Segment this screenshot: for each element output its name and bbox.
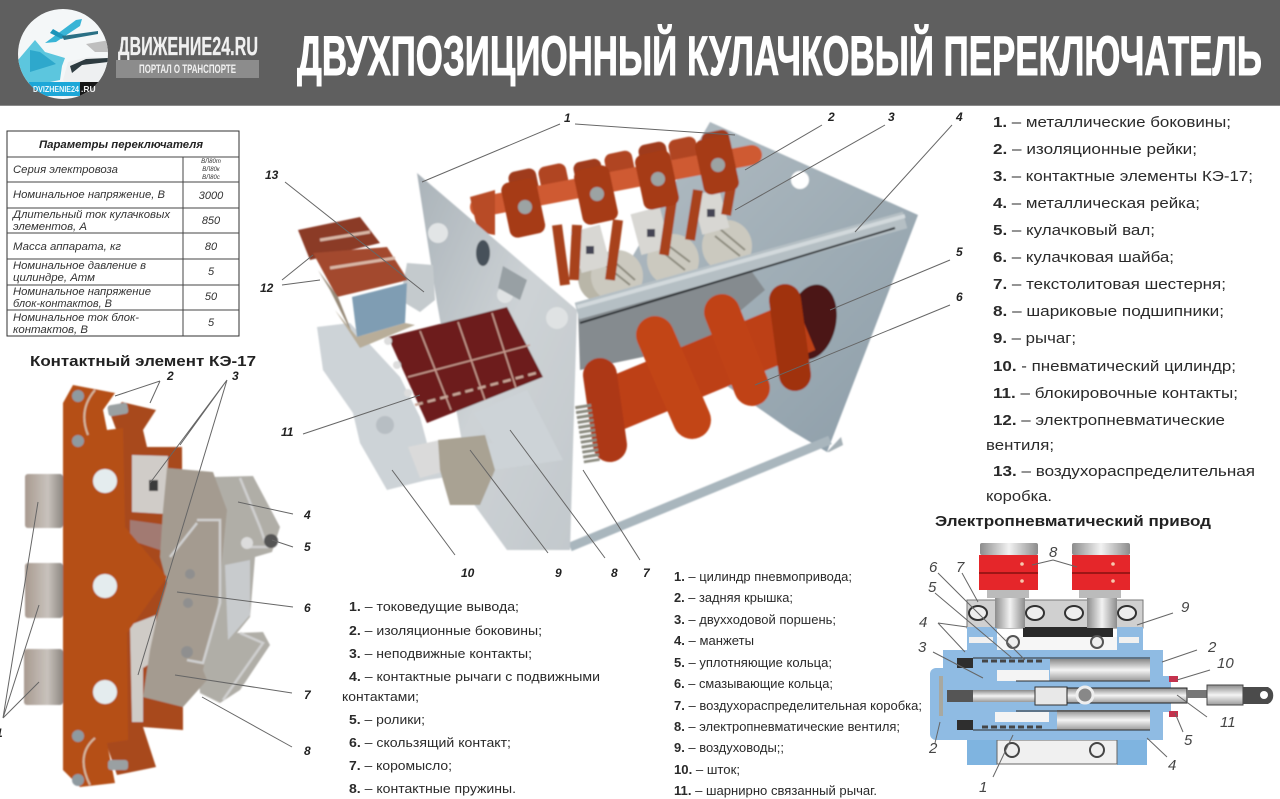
- legend: main assembly: вентиля;: [986, 438, 1054, 454]
- legend: pneumatic drive: 3. – двухходовой поршень;: [674, 613, 836, 627]
- upper rear clamps: [507, 128, 734, 202]
- legend: main assembly: 2. – изоляционные рейки;: [993, 142, 1197, 158]
- legend: main assembly: 9. – рычаг;: [993, 331, 1076, 347]
- legend: contact element: 8. – контактные пружины.: [349, 782, 516, 796]
- legend: pneumatic drive: 5. – уплотняющие кольца;: [674, 656, 832, 670]
- legend: pneumatic drive: 8. – электропневматические вентиля;: [674, 720, 900, 734]
- legend: main assembly: 13. – воздухораспределительная: [993, 464, 1255, 480]
- contact element callouts: 6: [304, 601, 311, 615]
- front red plate: [63, 385, 167, 787]
- diagram callouts: 3: [918, 639, 927, 656]
- parameters table: 850: [202, 215, 221, 227]
- header band: [0, 0, 1280, 106]
- parameters table: элементов, А: [13, 221, 87, 233]
- parameters table: Серия электровоза: [13, 164, 118, 176]
- parameters table: ВЛ80к: [202, 167, 221, 173]
- diagram callouts: 6: [929, 559, 938, 576]
- parameters table: Масса аппарата, кг: [13, 241, 122, 253]
- parameters table: 80: [205, 241, 218, 253]
- valve boxes: [298, 217, 435, 348]
- contact tabs: [24, 474, 63, 705]
- legend: pneumatic drive: 11. – шарнирно связанный рычаг.: [674, 784, 877, 798]
- diagram callouts: 11: [1220, 714, 1236, 731]
- contact element callouts: 7: [304, 688, 312, 702]
- legend: main assembly: 12. – электропневматические: [993, 413, 1225, 429]
- diagram: electro-pneumatic drive: [918, 543, 1273, 796]
- brown strips: [557, 175, 733, 285]
- heading: pneumatic drive: Электропневматический привод: [935, 514, 1211, 530]
- parameters table: 50: [205, 291, 218, 303]
- contact element callouts: 8: [304, 744, 311, 758]
- main callouts: 11: [281, 425, 294, 439]
- contact element callouts: 3: [232, 369, 239, 383]
- diagram callouts: 7: [956, 559, 965, 576]
- legend: main assembly: 8. – шариковые подшипники;: [993, 304, 1224, 320]
- parameters table: Номинальное напряжение: [13, 286, 151, 298]
- parameters table: Номинальное напряжение, В: [13, 189, 165, 201]
- logo banner text: .RU: [81, 84, 96, 94]
- white contact blocks: [571, 189, 729, 273]
- legend: contact element: 5. – ролики;: [349, 713, 425, 727]
- photo: cam switch assembly: [298, 122, 918, 550]
- legend: main assembly: 7. – текстолитовая шестерня;: [993, 277, 1226, 293]
- legend: main assembly: коробка.: [986, 489, 1052, 505]
- legend: main assembly: 3. – контактные элементы КЭ-17;: [993, 169, 1253, 185]
- legend: main assembly: [986, 115, 1255, 505]
- photo: contact element KE-17: [24, 385, 280, 787]
- diagram callouts: 1: [979, 779, 987, 796]
- piston rings: [982, 661, 1044, 727]
- parameters table: Длительный ток кулачковых: [11, 209, 171, 221]
- pneumatic cylinder body: [317, 323, 563, 490]
- parameters table: блок-контактов, В: [13, 298, 112, 310]
- legend: pneumatic drive: 4. – манжеты: [674, 634, 754, 648]
- parameters table: [7, 131, 239, 336]
- solenoid valve left: [979, 543, 1038, 628]
- lever: [143, 468, 227, 707]
- main callouts: 10: [461, 566, 475, 580]
- front plate bolts and hole: [428, 223, 568, 329]
- legend: pneumatic drive: 9. – воздуховоды;;: [674, 741, 784, 755]
- legend: contact element: 2. – изоляционные боковины;: [349, 624, 542, 638]
- diagram callouts: 10: [1217, 655, 1234, 672]
- rear red side plate: [105, 402, 183, 775]
- hole in rear plate: [791, 171, 809, 189]
- parameters table: ВЛ80т: [201, 159, 221, 165]
- spring bars: [170, 478, 267, 700]
- legend: contact element: 4. – контактные рычаги с подвижными: [349, 670, 600, 684]
- silver cam contacts: [578, 220, 765, 370]
- parameters table: цилиндре, Атм: [13, 272, 95, 284]
- main callouts: 12: [260, 281, 274, 295]
- diagram callouts: 9: [1181, 599, 1190, 616]
- legend: contact element: 3. – неподвижные контакты;: [349, 647, 532, 661]
- legend: main assembly: 6. – кулачковая шайба;: [993, 250, 1174, 266]
- legend: main assembly: 5. – кулачковый вал;: [993, 223, 1155, 239]
- parameters table: 5: [208, 266, 215, 278]
- valve body: [967, 600, 1143, 652]
- solenoid valve right: [1072, 543, 1130, 628]
- logo wordmark: [116, 31, 259, 78]
- diagram callouts: 2: [1207, 639, 1217, 656]
- logo banner text: DVIZHENIE24: [33, 84, 79, 94]
- contact element callouts: [0, 369, 312, 758]
- legend: main assembly: 10. - пневматический цилиндр;: [993, 359, 1236, 375]
- main callouts: 5: [956, 245, 963, 259]
- logo wordmark: ПОРТАЛ О ТРАНСПОРТЕ: [139, 62, 236, 76]
- rear metal side plate: [590, 122, 918, 452]
- diagram callouts: 4: [1168, 757, 1176, 774]
- bronze lever: [408, 435, 495, 505]
- main callouts: 3: [888, 110, 895, 124]
- diagram callouts: 5: [1184, 732, 1193, 749]
- legend: pneumatic drive: 7. – воздухораспределительная коробка;: [674, 699, 922, 713]
- main callouts: 1: [564, 111, 571, 125]
- metal rail rod: [577, 220, 905, 311]
- rivets: [72, 390, 129, 786]
- main callouts: 6: [956, 290, 963, 304]
- main callouts: 2: [827, 110, 835, 124]
- parameters table: 3000: [199, 190, 224, 202]
- diagram callouts: 5: [928, 579, 937, 596]
- parameters table: контактов, В: [13, 324, 88, 336]
- legend: pneumatic drive: 2. – задняя крышка;: [674, 591, 793, 605]
- logo emblem: [18, 9, 110, 99]
- piston rod: [947, 676, 1273, 717]
- contact element callouts: 4: [303, 508, 311, 522]
- rail clamps: [470, 134, 740, 239]
- parameters table: Номинальное давление в: [13, 260, 146, 272]
- logo wordmark: ДВИЖЕНИЕ24.RU: [118, 31, 258, 61]
- legend: contact element: контактами;: [342, 690, 419, 704]
- fixed contacts: [130, 455, 168, 722]
- block contacts: [384, 307, 543, 423]
- diagram callouts: [918, 544, 1236, 796]
- contact element callouts: 5: [304, 540, 311, 554]
- main callouts: 13: [265, 168, 279, 182]
- legend: contact element: [342, 600, 600, 796]
- legend: pneumatic drive: 6. – смазывающие кольца;: [674, 677, 833, 691]
- diagram callouts: 2: [928, 740, 938, 757]
- insulating rail: [480, 155, 752, 207]
- parameters table: 5: [208, 317, 215, 329]
- legend: pneumatic drive: 1. – цилиндр пневмопривода;: [674, 570, 852, 584]
- legend: contact element: 1. – токоведущие вывода;: [349, 600, 519, 614]
- parameters table: Параметры переключателя: [39, 139, 204, 151]
- legend: main assembly: 11. – блокировочные контакты;: [993, 386, 1238, 402]
- bottom rod: [570, 440, 830, 547]
- front metal side plate: [417, 173, 577, 550]
- parameters table: ВЛ80с: [202, 175, 220, 181]
- parameters table: Номинальное ток блок-: [13, 312, 139, 324]
- main callouts: 4: [955, 110, 963, 124]
- diagram callouts: 8: [1049, 544, 1058, 561]
- main callouts: [260, 110, 963, 580]
- rear frame: [190, 476, 280, 703]
- plate holes: [93, 469, 117, 704]
- legend: contact element: 7. – коромысло;: [349, 759, 452, 773]
- cam shaft: [583, 280, 843, 462]
- cylinder housing: [930, 650, 1171, 765]
- legend: main assembly: 1. – металлические боковины;: [993, 115, 1231, 131]
- main callouts: 7: [643, 566, 651, 580]
- legend: main assembly: 4. – металлическая рейка;: [993, 196, 1200, 212]
- diagram callouts: 4: [919, 614, 927, 631]
- legend: contact element: 6. – скользящий контакт;: [349, 736, 511, 750]
- legend: pneumatic drive: 10. – шток;: [674, 763, 740, 777]
- contact element callouts: 2: [166, 369, 174, 383]
- legend: pneumatic drive: [674, 570, 922, 798]
- main callouts: 8: [611, 566, 618, 580]
- heading: contact element: Контактный элемент КЭ-17: [30, 353, 256, 370]
- main callouts: 9: [555, 566, 562, 580]
